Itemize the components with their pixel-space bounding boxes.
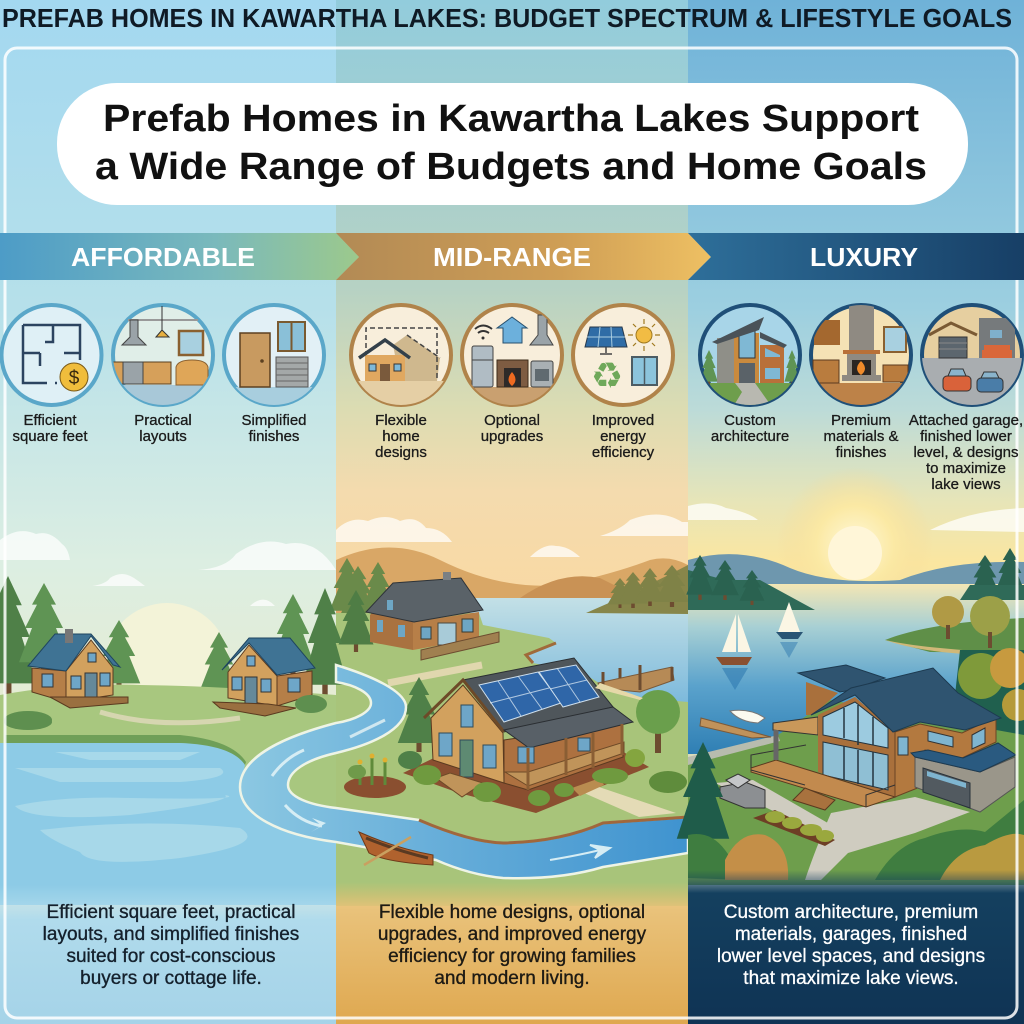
icon: door and window [222, 305, 326, 407]
panel: mid-range column background [336, 0, 688, 1024]
icon: fir tree [677, 742, 729, 852]
label: attached garage: to maximize [926, 460, 1006, 477]
text block: luxury summary: lower level spaces, and designs [717, 946, 985, 967]
icon: sailboat right [776, 602, 803, 658]
icon: round tree [636, 690, 680, 753]
headline pill: Prefab Homes in Kawartha Lakes Support [103, 98, 919, 140]
banner: luxury [688, 233, 1024, 280]
label: simplified finishes: finishes [249, 428, 299, 445]
label: optional upgrades: upgrades [481, 428, 543, 445]
icon: premium materials [809, 305, 913, 408]
lake [0, 743, 336, 905]
driveway [715, 780, 970, 880]
scene: mid-range lakeside [330, 514, 690, 906]
icon: upper cabin [366, 572, 499, 660]
text block: luxury summary: that maximize lake views. [743, 968, 959, 989]
icon: solar and recycling [573, 305, 673, 405]
headline pill: a Wide Range of Budgets and Home Goals [95, 146, 927, 188]
scene: luxury lakeside [677, 467, 1024, 885]
island right [885, 618, 1024, 655]
icon: small cabin right [213, 638, 315, 716]
label: flexible home designs: home [382, 428, 420, 445]
scene: affordable lakeside [0, 531, 348, 905]
label: premium materials and finishes: materials & [823, 428, 899, 445]
label: custom architecture: architecture [711, 428, 789, 445]
icon: dock [598, 665, 674, 692]
icon: flexible design house [349, 305, 453, 407]
label: flexible home designs: Flexible [375, 412, 427, 429]
icon: garden bed [753, 810, 835, 846]
label: premium materials and finishes: finishes [836, 444, 886, 461]
text block: affordable summary: buyers or cottage life. [80, 968, 262, 989]
text block: luxury summary: Custom architecture, premium [724, 902, 978, 923]
icon: custom architecture [698, 305, 802, 407]
text block: affordable summary: layouts, and simplified finishes [43, 924, 299, 945]
icon: small cabin left [28, 629, 128, 708]
label: flexible home designs: designs [375, 444, 427, 461]
text block: mid-range summary: Flexible home designs, optional [379, 902, 645, 923]
label: practical layouts: Practical [134, 412, 192, 429]
icon: solar home [424, 658, 633, 797]
icon: grill [720, 774, 765, 808]
text block: mid-range summary: and modern living. [434, 968, 590, 989]
icon: house bed [403, 750, 649, 813]
banner: affordable [0, 233, 359, 280]
icon: luxury home [751, 665, 1016, 812]
label: improved energy efficiency: energy [600, 428, 646, 445]
land [0, 684, 336, 845]
icon: solar and recycling: ♻ [591, 355, 623, 396]
land [336, 613, 688, 906]
banner: mid-range: MID-RANGE [433, 242, 591, 272]
panel: luxury column background [688, 0, 1024, 1024]
panel: affordable column background [0, 0, 336, 1024]
icon: canoe [359, 832, 433, 865]
icon: front bushes [688, 800, 1024, 880]
label: optional upgrades: Optional [484, 412, 540, 429]
banner: luxury: LUXURY [810, 242, 918, 272]
lawn [688, 700, 1024, 885]
label: attached garage: lake views [931, 476, 1001, 493]
icon: garage [920, 305, 1024, 408]
footer band: affordable [0, 885, 336, 1024]
label: attached garage: Attached garage, [909, 412, 1023, 429]
banner: affordable: AFFORDABLE [71, 242, 255, 272]
text block: affordable summary: suited for cost-conscious [66, 946, 276, 967]
label: efficient square feet: Efficient [23, 412, 77, 429]
icon: sailboat left [716, 614, 752, 690]
label: improved energy efficiency: efficiency [592, 444, 655, 461]
label: attached garage: finished lower [920, 428, 1012, 445]
icon: round trees right [932, 596, 1010, 648]
label: practical layouts: layouts [139, 428, 187, 445]
far forest island [586, 565, 690, 614]
footer band: luxury [688, 870, 1024, 1024]
icon: floor plan with dollar [2, 305, 102, 405]
icon: right trees [958, 648, 1024, 721]
label: simplified finishes: Simplified [241, 412, 307, 429]
headline pill [57, 83, 968, 205]
path [584, 787, 676, 817]
icon: garden bed [344, 754, 406, 798]
title: PREFAB HOMES IN KAWARTHA LAKES: BUDGET SPECTRUM & LIFESTYLE GOALS [2, 5, 1012, 33]
banner: mid-range [336, 233, 711, 280]
label: improved energy efficiency: Improved [592, 412, 654, 429]
text block: mid-range summary: upgrades, and improved energy [378, 924, 647, 945]
far forest [686, 555, 815, 610]
icon: practical layout room [111, 305, 215, 410]
label: custom architecture: Custom [724, 412, 776, 429]
label: premium materials and finishes: Premium [831, 412, 891, 429]
icon: smart upgrades [460, 305, 564, 407]
label: efficient square feet: square feet [12, 428, 88, 445]
river [240, 665, 688, 878]
text block: affordable summary: Efficient square feet, practical [47, 902, 295, 923]
icon: floor plan with dollar: $ [69, 368, 80, 389]
text block: mid-range summary: efficiency for growing families [388, 946, 636, 967]
icon: dock and boat [700, 710, 771, 738]
label: attached garage: level, & designs [913, 444, 1019, 461]
footer band: mid-range [336, 882, 688, 1024]
text block: luxury summary: materials, garages, finished [735, 924, 967, 945]
icon: bushes [398, 749, 687, 806]
